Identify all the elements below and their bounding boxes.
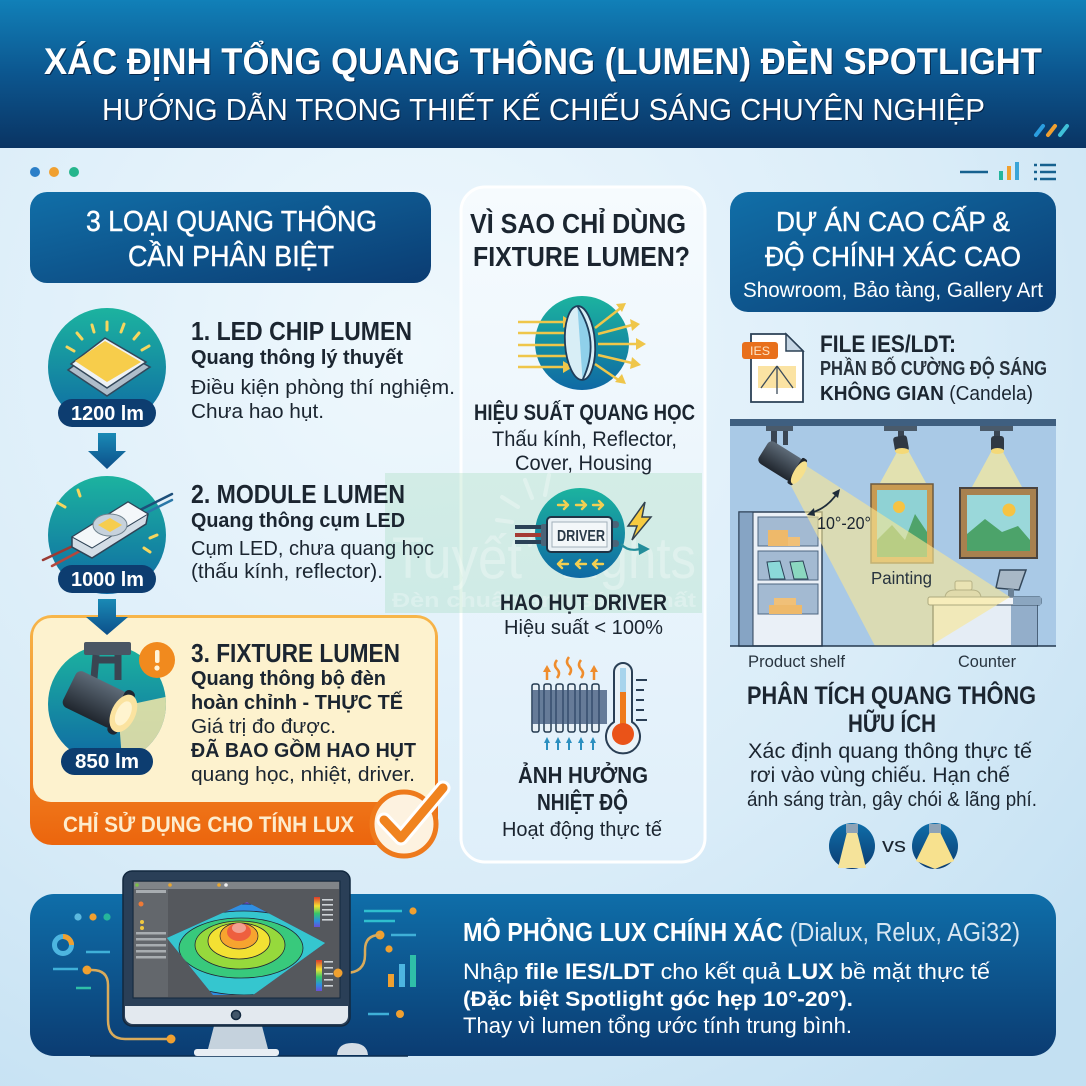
text block: driver loss	[500, 590, 667, 639]
text block: LED chip lumen: 1. LED CHIP LUMEN	[191, 318, 412, 346]
panel: fixture lumen highlight box	[30, 615, 438, 845]
decorative left marks	[53, 913, 176, 1044]
label: beam angle: 10°-20°	[817, 513, 871, 533]
painting right	[960, 488, 1037, 558]
main track spotlight	[755, 426, 811, 488]
panel: right heading	[730, 192, 1056, 312]
text block: optical efficiency	[474, 400, 695, 475]
text block: LED chip lumen: Điều kiện phòng thí nghiệm.	[191, 376, 455, 399]
watermark: Đèn chuẩn ánh sáng chất	[392, 590, 696, 612]
text block: useful flux analysis: Xác định quang thông thực tế	[748, 740, 1032, 763]
text block: lux simulation description	[463, 959, 990, 1038]
panel: left heading: 3 LOẠI QUANG THÔNG	[86, 204, 377, 238]
panel: right heading: DỰ ÁN CAO CẤP &	[776, 206, 1010, 237]
icon: heat sink and thermometer	[532, 657, 647, 753]
panel: why fixture lumen	[470, 207, 695, 841]
label: 850 lm: 850 lm	[75, 751, 139, 773]
text block: fixture lumen: Quang thông bộ đèn	[191, 668, 386, 690]
text block: module lumen: (thấu kính, reflector).	[191, 560, 383, 583]
panel: left heading: CẦN PHÂN BIỆT	[128, 239, 334, 273]
light beam	[788, 465, 1010, 646]
text block: IES/LDT file	[820, 331, 1047, 405]
arrow: chip to module	[88, 433, 126, 469]
label: 1000 lm: 1000 lm	[71, 569, 144, 591]
label: 850 lm	[61, 748, 153, 775]
label: product shelf: Product shelf	[748, 652, 845, 671]
text block: optical efficiency: HIỆU SUẤT QUANG HỌC	[474, 400, 695, 425]
product shelf	[739, 512, 822, 646]
text block: useful flux analysis: ánh sáng tràn, gây chói & lãng phí.	[747, 788, 1037, 811]
small spot beams	[880, 452, 926, 483]
middle panel background	[461, 187, 705, 862]
watermark: Lights	[560, 526, 696, 591]
legend: colour scales	[314, 897, 333, 991]
panel: right heading: Showroom, Bảo tàng, Gallery Art	[743, 279, 1043, 302]
label: counter: Counter	[958, 652, 1016, 671]
icon: IES file: IES	[750, 344, 770, 358]
text block: optical efficiency: Cover, Housing	[515, 452, 652, 475]
icon: LED module	[43, 476, 172, 594]
small spotlight 2	[980, 426, 1013, 454]
monitor illustration	[123, 871, 368, 1056]
text block: IES/LDT file: KHÔNG GIAN (Candela)	[820, 381, 1033, 405]
text block: driver loss: Hiệu suất < 100%	[504, 616, 663, 639]
text block: fixture lumen	[191, 640, 416, 786]
icon: warning badge	[139, 642, 175, 678]
watermark	[385, 473, 702, 613]
watermark: Tuyết	[392, 526, 522, 591]
painting left	[871, 484, 933, 563]
chart: lux contour surface	[167, 902, 325, 995]
decorative dots	[30, 167, 79, 177]
callout: use for lux: CHỈ SỬ DỤNG CHO TÍNH LUX	[63, 812, 354, 837]
text block: LED chip lumen: Quang thông lý thuyết	[191, 347, 403, 369]
heading: why fixture lumen	[470, 207, 690, 272]
header banner	[0, 0, 1086, 148]
arrow: module to fixture	[86, 599, 128, 635]
text block: lux simulation description: Nhập file IES/LDT cho kết quả LUX bề mặt thực tế	[463, 959, 990, 984]
text block: module lumen: Cụm LED, chưa quang học	[191, 537, 434, 560]
text block: temperature effect: Hoạt động thực tế	[502, 818, 663, 841]
text block: useful flux analysis: PHÂN TÍCH QUANG THÔNG	[747, 680, 1036, 710]
text block: optical efficiency: Thấu kính, Reflector,	[492, 428, 677, 451]
text block: LED chip lumen	[191, 318, 455, 423]
flow arrows	[558, 501, 603, 568]
beam angle arc	[807, 489, 840, 516]
icon: spotlight fixture	[48, 642, 166, 750]
title: XÁC ĐỊNH TỔNG QUANG THÔNG (LUMEN) ĐÈN SPOTLIGHT	[44, 39, 1042, 82]
text block: useful flux analysis: HỮU ÍCH	[848, 708, 936, 738]
icon: beam comparison: vs	[882, 835, 906, 857]
text block: fixture lumen: 3. FIXTURE LUMEN	[191, 640, 400, 668]
text block: driver loss: HAO HỤT DRIVER	[500, 590, 667, 615]
icon: orange check mark	[372, 788, 443, 856]
icon: IES file	[742, 334, 803, 402]
icon: top right chart marks	[960, 162, 1056, 180]
text block: lux simulation description: (Đặc biệt Spotlight góc hẹp 10°-20°).	[463, 987, 853, 1011]
text block: fixture lumen: ĐÃ BAO GỒM HAO HỤT	[191, 738, 416, 762]
text block: LED chip lumen: Chưa hao hụt.	[191, 400, 324, 423]
label: 1200 lm	[58, 399, 156, 427]
text block: fixture lumen: Giá trị đo được.	[191, 715, 336, 738]
heading: why fixture lumen: FIXTURE LUMEN?	[473, 241, 690, 272]
label: 1200 lm: 1200 lm	[71, 403, 144, 425]
icon: LED driver: DRIVER	[557, 528, 605, 545]
icon: header slashes	[1036, 126, 1067, 135]
icon: beam comparison	[829, 823, 958, 869]
heading: why fixture lumen: VÌ SAO CHỈ DÙNG	[470, 207, 686, 239]
icon: LED chip	[48, 308, 166, 426]
small spotlight 1	[884, 426, 917, 454]
icon: lens with rays	[518, 296, 646, 390]
text block: fixture lumen: quang học, nhiệt, driver.	[191, 763, 415, 786]
text block: module lumen	[191, 481, 434, 583]
heading: accurate lux simulation: MÔ PHỎNG LUX CHÍNH XÁC (Dialux, Relux, AGi32)	[463, 917, 1020, 947]
panel: lux simulation	[30, 871, 1056, 1056]
label: 1000 lm	[58, 565, 156, 593]
icon: LED driver	[515, 488, 651, 578]
text block: module lumen: 2. MODULE LUMEN	[191, 481, 405, 509]
text block: useful flux analysis: rơi vào vùng chiếu. Hạn chế	[750, 764, 1010, 787]
text block: temperature effect: ẢNH HƯỞNG	[518, 760, 648, 788]
text block: useful flux analysis	[747, 680, 1037, 811]
text block: fixture lumen: hoàn chỉnh - THỰC TẾ	[191, 691, 403, 714]
text block: IES/LDT file: FILE IES/LDT:	[820, 331, 956, 358]
text block: lux simulation description: Thay vì lumen tổng ước tính trung bình.	[463, 1013, 852, 1038]
panel: left heading	[30, 192, 431, 283]
text block: temperature effect	[502, 760, 663, 841]
decorative right marks	[338, 907, 417, 1018]
text block: temperature effect: NHIỆT ĐỘ	[537, 788, 628, 815]
subtitle: HƯỚNG DẪN TRONG THIẾT KẾ CHIẾU SÁNG CHUYÊN NGHIỆP	[102, 92, 985, 127]
text block: module lumen: Quang thông cụm LED	[191, 510, 405, 532]
panel: right heading: ĐỘ CHÍNH XÁC CAO	[765, 241, 1021, 272]
illustration: gallery scene	[730, 419, 1056, 646]
label: painting: Painting	[871, 568, 932, 588]
counter	[928, 570, 1041, 646]
